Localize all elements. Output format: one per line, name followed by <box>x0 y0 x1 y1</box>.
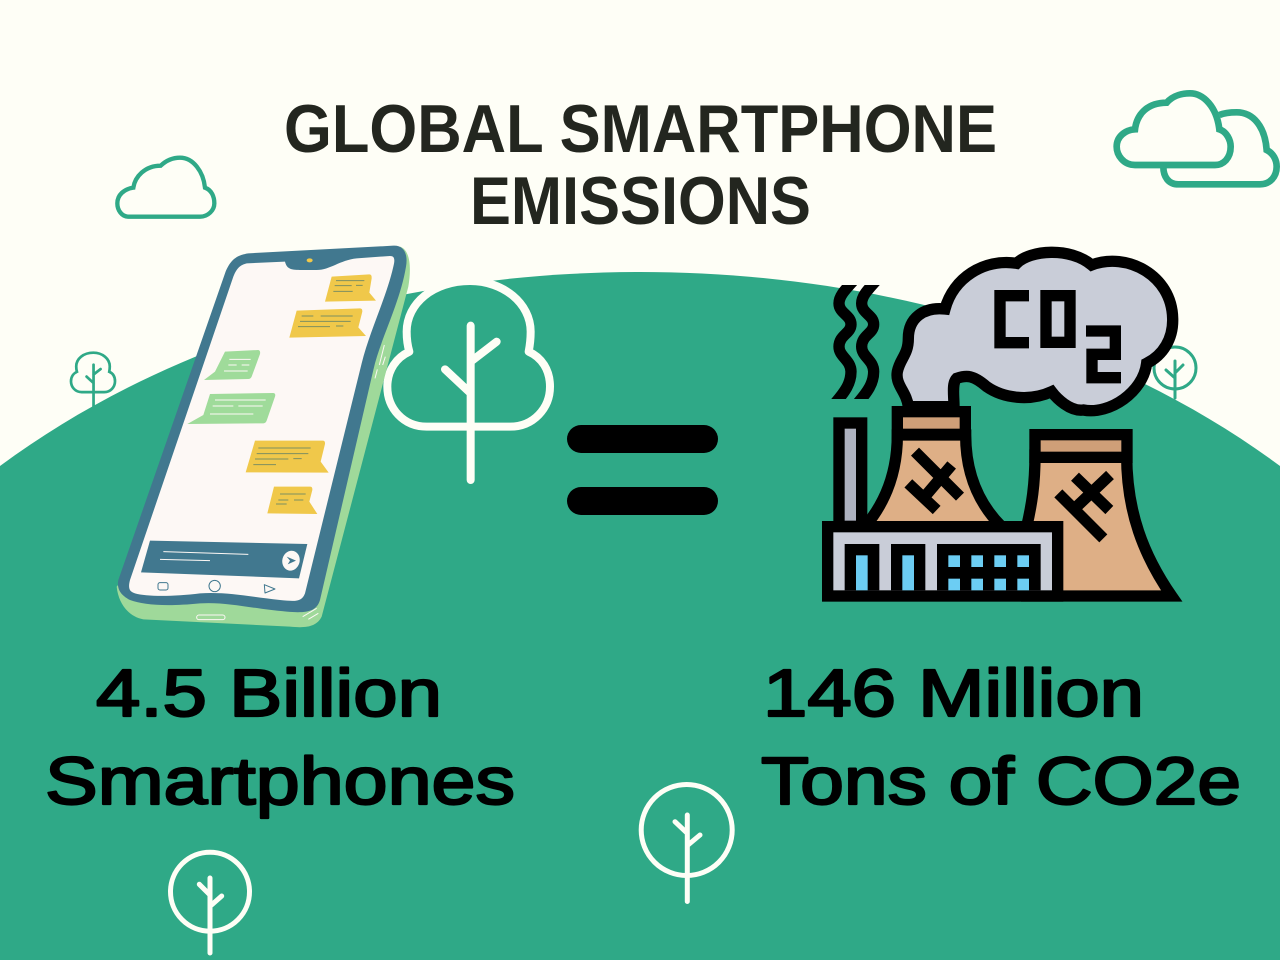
caption: smartphones <box>45 656 515 819</box>
green hill background <box>0 272 1280 960</box>
bubble text lines <box>253 281 364 504</box>
caption: smartphones: Smartphones <box>45 744 515 819</box>
phone green back <box>117 247 410 627</box>
smoke stack <box>839 423 862 526</box>
icon: smartphone with chat bubbles <box>117 246 410 627</box>
icon: double cloud right <box>1117 93 1277 184</box>
camera <box>307 258 313 262</box>
CO2 lettering shapes as label <box>1000 296 1121 378</box>
icon: tree circle bottom <box>170 852 250 953</box>
message input bar <box>141 541 307 578</box>
icon: small tree right <box>1154 347 1196 398</box>
phone blue frame <box>118 246 407 612</box>
cooling tower left <box>865 412 1002 527</box>
navigation buttons <box>158 580 275 593</box>
icon: factory emitting CO2 <box>828 252 1173 596</box>
icon: large tree outline <box>387 281 550 480</box>
equals sign <box>567 425 718 515</box>
caption: emissions: Tons of CO2e <box>761 744 1241 819</box>
title: GLOBAL SMARTPHONE <box>284 91 997 167</box>
caption: smartphones: 4.5 Billion <box>96 656 442 731</box>
caption: emissions <box>761 656 1241 819</box>
phone screen <box>129 256 394 601</box>
title <box>284 91 997 239</box>
wavy heat lines <box>835 280 877 403</box>
factory building <box>828 527 1058 596</box>
icon: small tree left <box>71 353 115 407</box>
doors and windows <box>845 544 879 590</box>
phone side highlights <box>197 345 385 620</box>
CO2 cloud <box>897 252 1173 411</box>
title: EMISSIONS <box>470 163 811 239</box>
cooling tower right <box>1027 435 1172 596</box>
caption: emissions: 146 Million <box>763 656 1144 731</box>
icon: small cloud left <box>117 158 214 217</box>
green chat bubbles <box>187 350 275 424</box>
send button <box>280 549 302 573</box>
icon: tree circle centre <box>641 784 732 902</box>
yellow chat bubbles <box>246 274 376 514</box>
